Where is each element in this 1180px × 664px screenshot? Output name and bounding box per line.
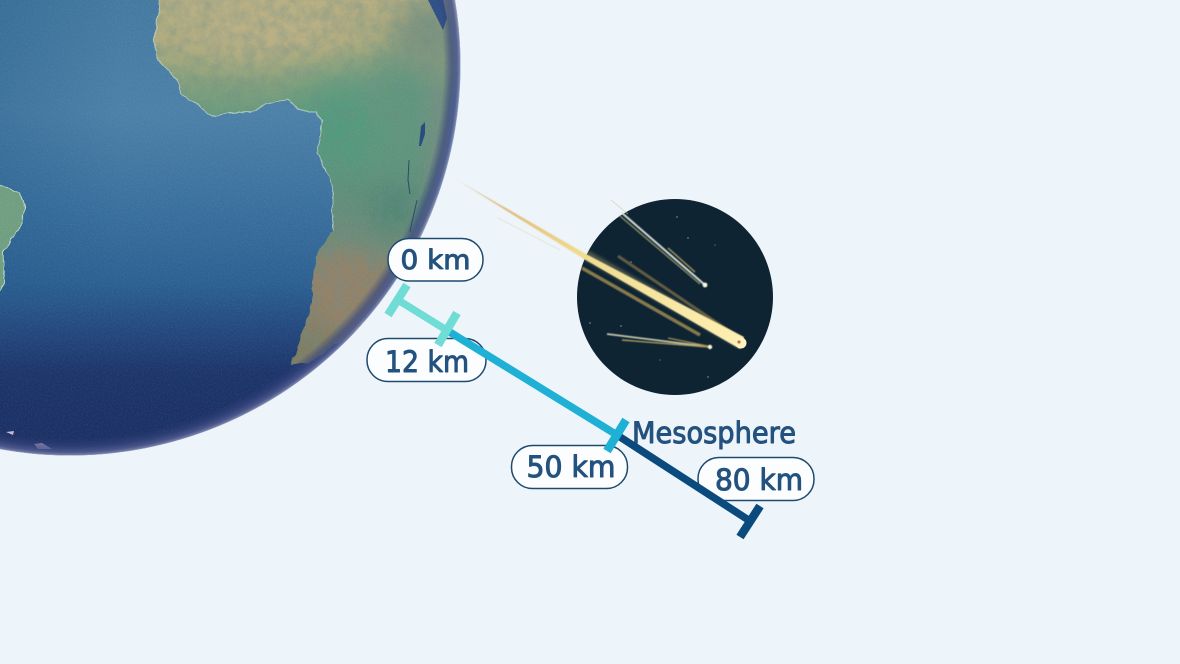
upper meteor bbox=[620, 213, 707, 287]
label: 50 km bbox=[512, 446, 628, 488]
label: 50 km: 50 km bbox=[526, 450, 616, 484]
secondary trail bbox=[582, 256, 735, 335]
tick: 0 km bbox=[388, 285, 407, 315]
label: Mesosphere: Mesosphere bbox=[632, 416, 796, 450]
atmosphere rim bbox=[0, 0, 470, 460]
continent: Africa bbox=[145, 0, 465, 370]
segment: stratosphere bbox=[448, 331, 617, 435]
coast highlight bbox=[153, 0, 333, 230]
red sea bbox=[427, 0, 447, 30]
meteor lens bbox=[577, 199, 773, 395]
tick: 50 km bbox=[607, 420, 626, 451]
stars bbox=[589, 216, 716, 378]
label: 0 km bbox=[388, 238, 483, 281]
main meteor streak bbox=[452, 177, 746, 349]
label: 80 km bbox=[698, 458, 814, 500]
lake bbox=[419, 122, 425, 146]
segment: troposphere bbox=[398, 300, 448, 331]
faint streak above lens bbox=[611, 200, 628, 214]
main meteor glow bbox=[586, 255, 740, 343]
tick: 12 km bbox=[438, 313, 457, 345]
globe bbox=[0, 0, 470, 460]
fine speckle bbox=[0, 0, 470, 460]
meteor head bbox=[736, 338, 746, 348]
night sky circle bbox=[577, 199, 773, 395]
continent: South America bbox=[0, 183, 25, 303]
antarctic islands bbox=[6, 431, 52, 449]
segment: mesosphere bbox=[617, 435, 750, 521]
label: 0 km: 0 km bbox=[400, 245, 470, 276]
ocean left shading bbox=[0, 0, 50, 190]
label: 12 km bbox=[367, 338, 486, 382]
rift lakes bbox=[408, 160, 417, 232]
lower meteor bbox=[607, 334, 712, 349]
ocean bbox=[0, 0, 470, 460]
altitude scale bbox=[388, 285, 760, 537]
label: 80 km: 80 km bbox=[715, 463, 803, 497]
tick: 80 km bbox=[740, 506, 760, 537]
label: 12 km: 12 km bbox=[385, 345, 469, 379]
